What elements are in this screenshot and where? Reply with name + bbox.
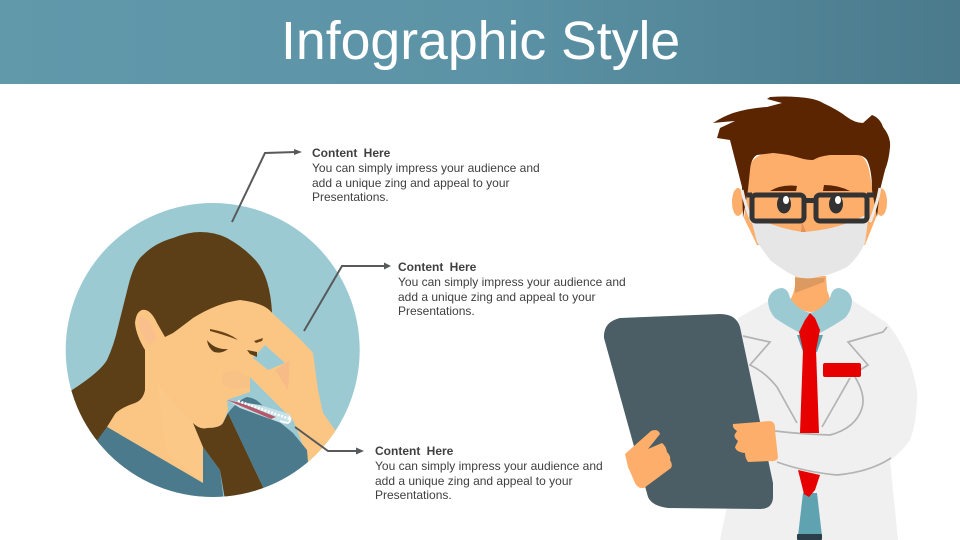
eyes bbox=[777, 194, 843, 214]
shirt below tie knot bbox=[797, 335, 823, 352]
glasses bbox=[747, 195, 875, 221]
text block: bottom callout: add a unique zing and appeal to your bbox=[375, 474, 572, 488]
nose bbox=[801, 222, 806, 232]
text block: middle callout: Presentations. bbox=[398, 304, 475, 318]
text block: top callout: Presentations. bbox=[312, 190, 389, 204]
hair bbox=[713, 96, 890, 218]
text block: top callout: You can simply impress your audience and bbox=[312, 161, 540, 175]
eyes and brows bbox=[210, 329, 238, 340]
illustrations and arrows bbox=[66, 96, 917, 540]
thermometer bbox=[227, 400, 292, 424]
mask straps bbox=[742, 188, 880, 222]
lab coat bbox=[720, 300, 917, 540]
text block: top callout: Content Here bbox=[312, 146, 390, 160]
title: Infographic Style bbox=[281, 11, 680, 71]
text block: middle callout: Content Here bbox=[398, 260, 476, 274]
text block: bottom callout: Presentations. bbox=[375, 488, 452, 502]
right hand on tablet bbox=[733, 421, 778, 462]
illustration: woman with fever bbox=[60, 203, 360, 510]
text block: bottom callout: Content Here bbox=[375, 444, 453, 458]
text block: middle callout: add a unique zing and appeal to your bbox=[398, 290, 596, 304]
header band bbox=[0, 0, 960, 84]
illustration: doctor bbox=[604, 96, 917, 540]
left hand on tablet bbox=[625, 430, 672, 488]
brows bbox=[770, 186, 797, 191]
text block: top callout bbox=[312, 146, 540, 204]
neck bbox=[790, 276, 830, 312]
collar bbox=[768, 288, 810, 333]
arrow: middle callout bbox=[304, 262, 391, 331]
tablet bbox=[604, 314, 773, 509]
head bbox=[713, 96, 890, 278]
arrow: bottom callout bbox=[295, 427, 364, 454]
pocket square bbox=[823, 363, 861, 377]
ears bbox=[732, 188, 744, 216]
text block: middle callout bbox=[398, 260, 626, 318]
mask bbox=[750, 213, 869, 278]
text block: middle callout: You can simply impress your audience and bbox=[398, 275, 626, 289]
text block: bottom callout bbox=[375, 444, 603, 502]
tie bbox=[799, 313, 820, 433]
coat lines bbox=[743, 327, 891, 475]
text block: top callout: add a unique zing and appeal to your bbox=[312, 176, 510, 190]
text block: bottom callout: You can simply impress your audience and bbox=[375, 459, 603, 473]
arrow: top callout bbox=[232, 149, 302, 222]
face bbox=[744, 153, 877, 245]
